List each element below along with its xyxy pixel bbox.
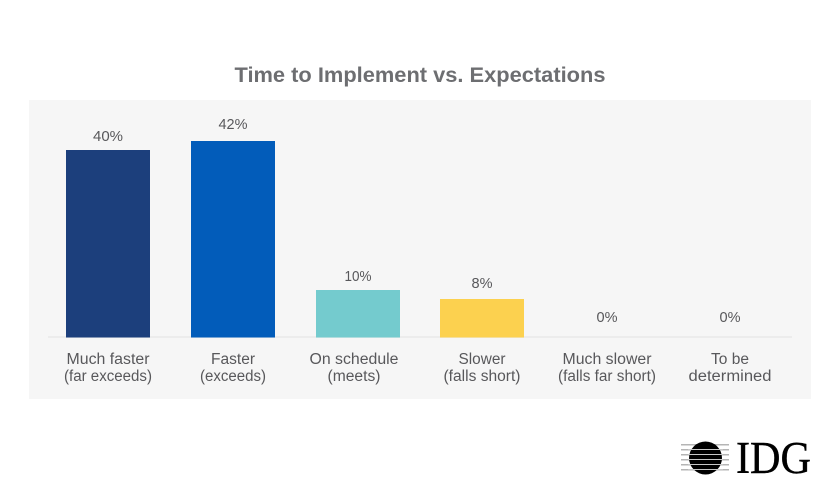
label: on schedule: On schedule bbox=[310, 351, 398, 368]
label: far exceeds: (far exceeds) bbox=[64, 368, 152, 385]
category labels bbox=[64, 351, 772, 385]
bar: faster 42%: 42% bbox=[218, 116, 248, 133]
label: determined: determined bbox=[688, 368, 772, 385]
logo globe bbox=[681, 442, 729, 474]
value: to be determined 0%: 0% bbox=[720, 309, 740, 326]
bar chart bbox=[48, 116, 792, 338]
bar: faster 42% bbox=[191, 116, 275, 338]
logo wordmark: IDG bbox=[736, 433, 811, 483]
bar: much faster 40% bbox=[66, 128, 150, 338]
label: falls short: (falls short) bbox=[444, 368, 520, 385]
label: much slower: Much slower bbox=[562, 351, 652, 368]
label: to be: To be bbox=[711, 351, 749, 368]
icon: IDG logo bbox=[681, 433, 811, 483]
bar: on schedule 10%: 10% bbox=[344, 268, 372, 285]
label: exceeds: (exceeds) bbox=[200, 368, 266, 385]
bar: slower 8% bbox=[440, 275, 524, 338]
value: much slower 0%: 0% bbox=[596, 309, 618, 326]
panel: chart background bbox=[29, 100, 811, 399]
label: much faster: Much faster bbox=[66, 351, 150, 368]
bar: on schedule 10% bbox=[316, 268, 400, 338]
label: meets: (meets) bbox=[328, 368, 380, 385]
label: slower: Slower bbox=[458, 351, 506, 368]
label: falls far short: (falls far short) bbox=[558, 368, 656, 385]
bar: much faster 40%: 40% bbox=[93, 128, 123, 145]
bar: slower 8%: 8% bbox=[472, 275, 492, 292]
title: Time to Implement vs. Expectations bbox=[234, 64, 606, 87]
label: faster: Faster bbox=[211, 351, 255, 368]
